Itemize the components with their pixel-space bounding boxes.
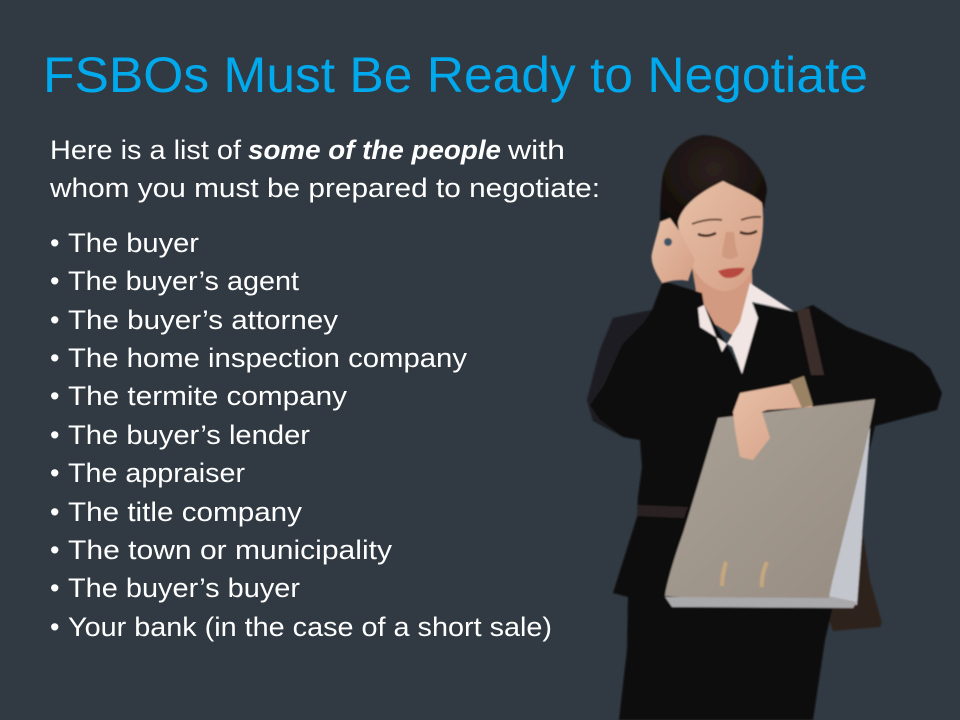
lips: [718, 268, 745, 278]
item: appraiser: The appraiser: [68, 458, 245, 488]
jacket and skirt: [587, 281, 942, 720]
item: buyer's buyer: The buyer’s buyer: [68, 573, 300, 603]
binder rings: [722, 562, 767, 587]
wristwatch: [790, 376, 813, 408]
item: buyer's lender: The buyer’s lender: [68, 420, 310, 450]
shirt collar: [698, 283, 793, 374]
phone: [683, 256, 689, 281]
shoulder bag strap: [797, 308, 824, 375]
item: town or municipality: •: [50, 535, 59, 565]
item: buyer's agent: The buyer’s agent: [68, 266, 300, 296]
intro text: Here is a list of: [50, 135, 242, 165]
item: your bank: Your bank (in the case of a short sale): [68, 612, 552, 642]
item: buyer's lender: •: [50, 420, 59, 450]
hand at ear: [652, 218, 695, 283]
item: termite company: The termite company: [68, 381, 348, 411]
face: [678, 181, 763, 291]
item: buyer: •: [50, 228, 59, 258]
ring: [664, 238, 672, 246]
bulleted list of negotiating parties: [50, 228, 552, 642]
item: buyer: The buyer: [68, 228, 199, 258]
eyes: [698, 231, 757, 236]
eyebrows: [692, 217, 761, 224]
item: buyer's buyer: •: [50, 573, 59, 603]
item: title company: The title company: [68, 497, 303, 527]
illustration: businesswoman on phone checking watch, holding binder: [587, 135, 942, 720]
item: your bank: •: [50, 612, 59, 642]
item: termite company: •: [50, 381, 59, 411]
intro text: some of the people: [248, 135, 501, 165]
item: town or municipality: The town or municipality: [68, 535, 393, 565]
item: title company: •: [50, 497, 59, 527]
intro text: with: [507, 135, 565, 165]
hair: [660, 135, 767, 232]
item: buyer's agent: •: [50, 266, 59, 296]
binder bottom edge: [665, 596, 857, 608]
nose shadow: [722, 232, 738, 259]
binder pages: [828, 428, 870, 605]
belt: [637, 505, 688, 518]
sleeve highlight: [587, 310, 652, 436]
neck: [692, 268, 753, 340]
handbag: [825, 533, 882, 631]
item: home inspection company: The home inspection company: [68, 343, 468, 373]
item: buyer's attorney: •: [50, 305, 59, 335]
item: home inspection company: •: [50, 343, 59, 373]
intro text: whom you must be prepared to negotiate:: [49, 173, 600, 203]
item: buyer's attorney: The buyer’s attorney: [68, 305, 339, 335]
binder cover: [665, 399, 875, 598]
item: appraiser: •: [50, 458, 59, 488]
title: FSBOs Must Be Ready to Negotiate: [43, 47, 868, 103]
hand on binder: [733, 383, 813, 460]
intro text: [49, 135, 600, 203]
